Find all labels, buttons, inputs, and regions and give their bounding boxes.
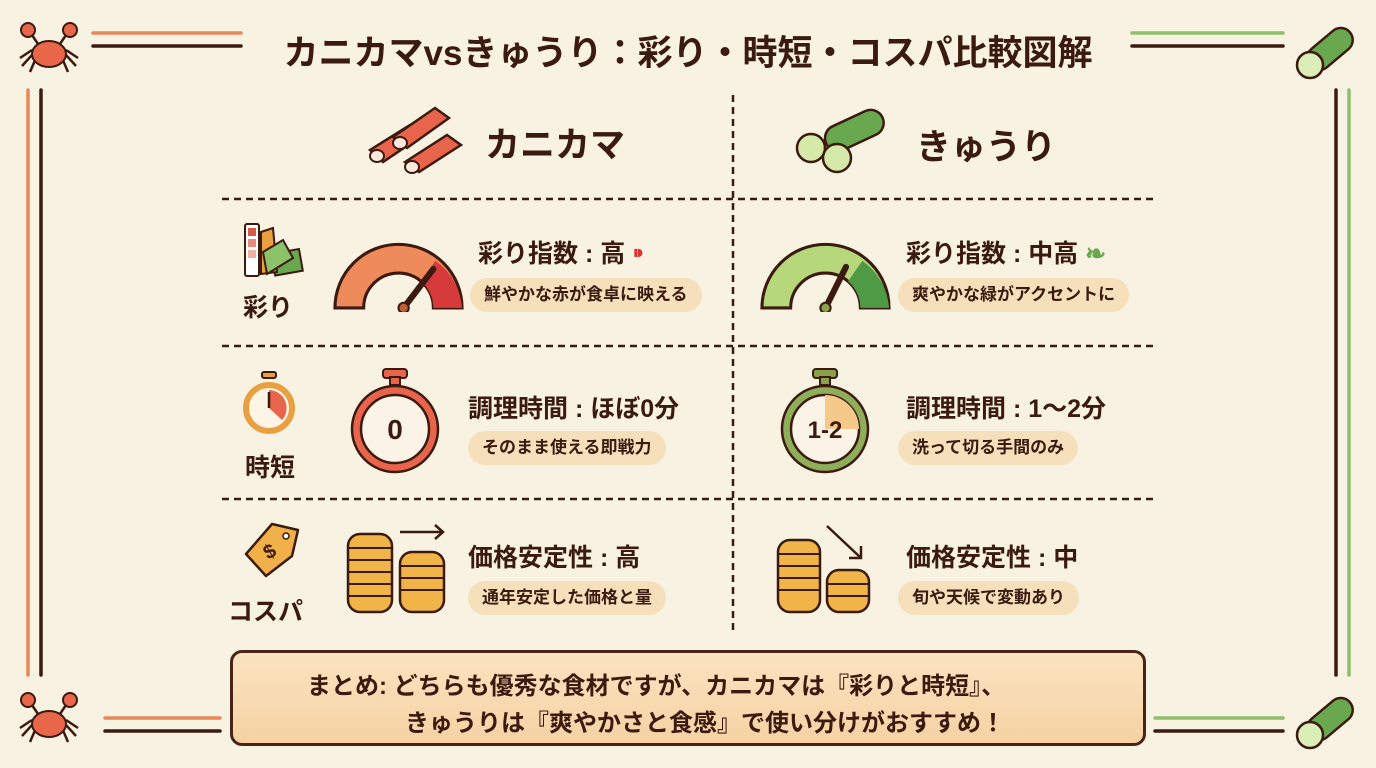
- row label: コスパ: コスパ: [228, 598, 303, 626]
- icon: stopwatch 1-2: [780, 368, 870, 474]
- icon: crab top-left: [19, 22, 79, 72]
- gauge: cucumber mid-high: [760, 242, 891, 312]
- summary box: [230, 650, 1146, 746]
- text: cucumber price: [898, 544, 1079, 615]
- row label: コスパ: $: [260, 540, 280, 564]
- text: kanikama price: 通年安定した価格と量: [482, 588, 652, 607]
- text: kanikama color: 鮮やかな赤が食卓に映える: [484, 285, 688, 304]
- text: cucumber price: 価格安定性 : 中: [906, 544, 1078, 572]
- text: kanikama color: 彩り指数 : 高 ⁍: [478, 240, 645, 268]
- header: cucumber: きゅうり: [916, 128, 1056, 167]
- icon: stopwatch 0: 0: [387, 414, 403, 445]
- icon: cucumber top-right: [1296, 26, 1354, 80]
- text: kanikama time: 調理時間 : ほぼ0分: [468, 395, 679, 423]
- row label: 時短: 時短: [245, 454, 295, 482]
- icon: stopwatch 1-2: 1-2: [808, 417, 842, 444]
- title: カニカマvsきゅうり：彩り・時短・コスパ比較図解: [284, 34, 1092, 73]
- row label: 彩り: 彩り: [243, 294, 293, 322]
- text: cucumber time: 調理時間 : 1〜2分: [906, 395, 1106, 423]
- text: kanikama price: 価格安定性 : 高: [468, 544, 640, 572]
- icon: coins falling: [776, 525, 870, 614]
- gauge: kanikama high: [333, 242, 464, 312]
- icon: cucumber bottom-right: [1296, 696, 1354, 750]
- text: kanikama color: [470, 240, 702, 312]
- row label: 彩り: [243, 223, 304, 322]
- text: kanikama time: [468, 395, 679, 465]
- text: cucumber color: 爽やかな緑がアクセントに: [912, 285, 1115, 304]
- summary box: まとめ: どちらも優秀な食材ですが、カニカマは『彩りと時短』、: [307, 673, 1005, 700]
- text: cucumber color: [898, 240, 1129, 312]
- summary box: きゅうりは『爽やかさと食感』で使い分けがおすすめ！: [405, 710, 1005, 737]
- text: cucumber color: 彩り指数 : 中高 ❧: [906, 240, 1106, 268]
- text: cucumber price: 旬や天候で変動あり: [912, 588, 1065, 607]
- header: cucumber: [796, 108, 1056, 174]
- row label: コスパ: [228, 522, 303, 626]
- header: kanikama: [368, 106, 625, 174]
- icon: stopwatch 0: [350, 368, 440, 474]
- text: cucumber time: [898, 395, 1106, 465]
- text: cucumber time: 洗って切る手間のみ: [912, 438, 1064, 457]
- text: kanikama time: そのまま使える即戦力: [482, 438, 652, 457]
- header: kanikama: カニカマ: [485, 126, 625, 165]
- text: kanikama price: [468, 544, 666, 615]
- icon: coins stable: [346, 524, 446, 614]
- icon: crab bottom-left: [19, 692, 79, 742]
- row label: 時短: [243, 371, 295, 482]
